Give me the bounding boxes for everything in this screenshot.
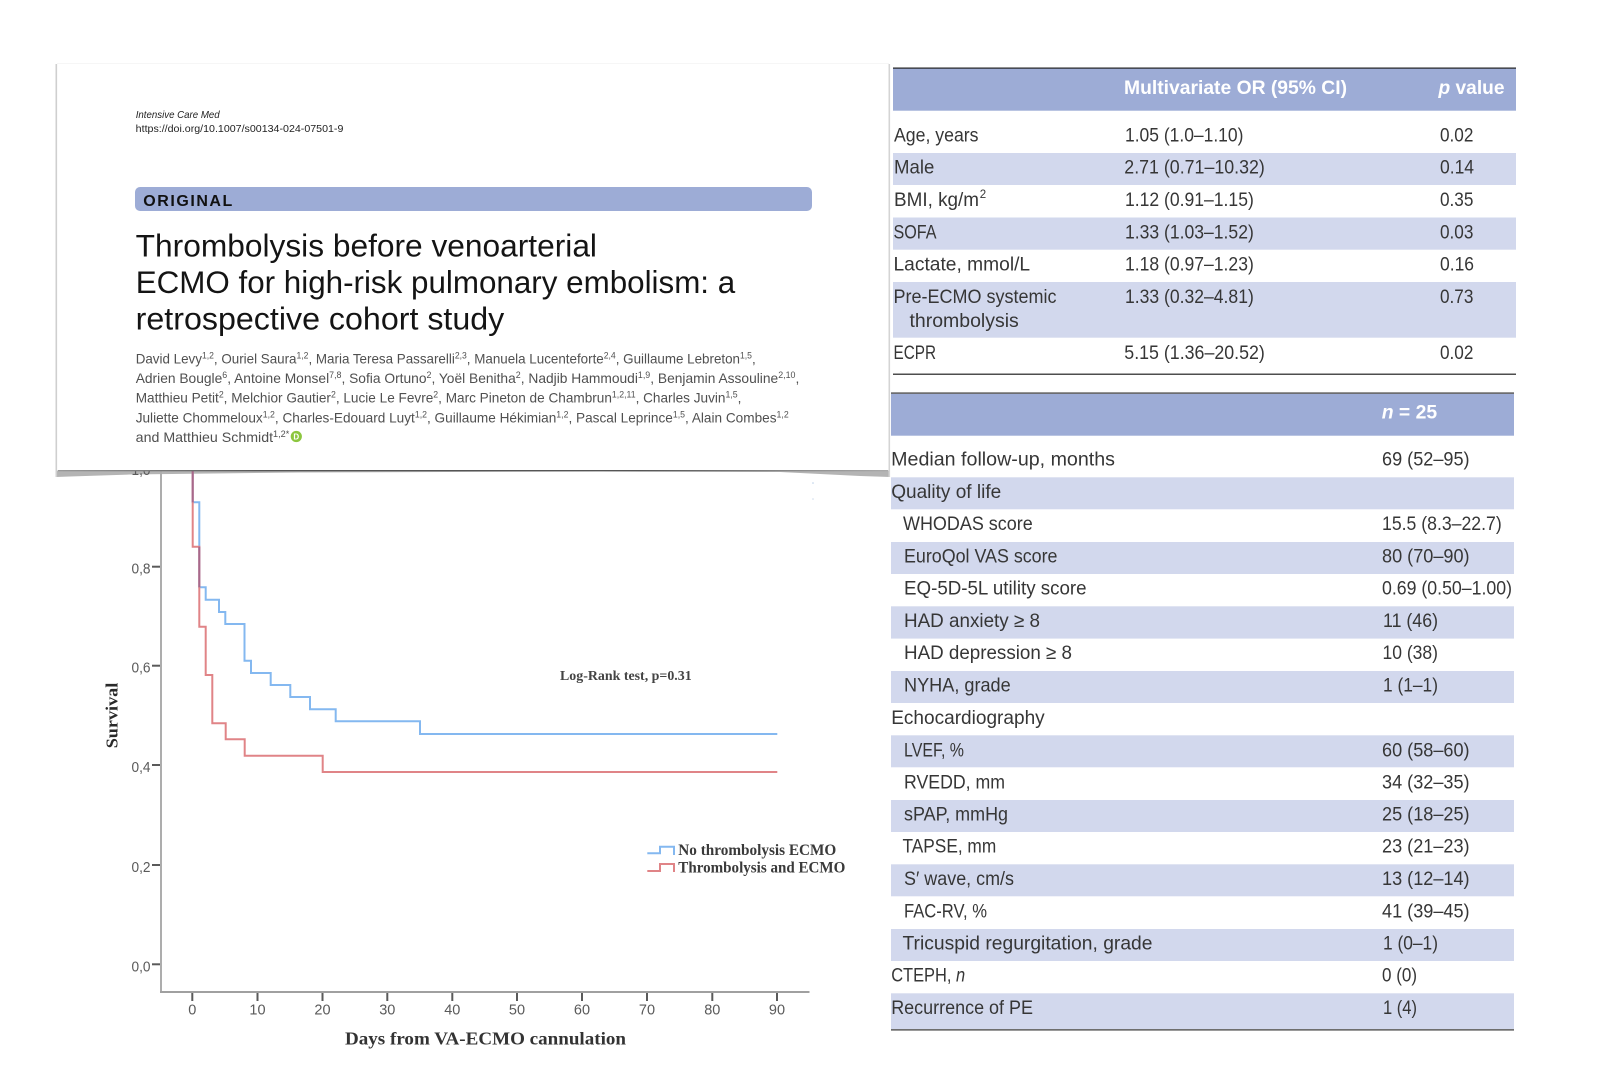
row: ECPR: 5.15 (1.36–20.52): [1124, 342, 1265, 364]
authors: 2: [331, 390, 336, 400]
authors: , Pascal Leprince: [568, 409, 673, 425]
x axis labels: 60: [574, 1003, 590, 1019]
table: long-term outcomes: [891, 392, 1514, 1031]
row: HAD depression: [904, 642, 1438, 664]
row: pre-ECMO thrombolysis: 1.33 (0.32–4.81): [1125, 286, 1254, 308]
authors: Adrien Bougle: [136, 370, 224, 386]
row: EuroQol: [891, 542, 1514, 574]
row: FAC-RV: [904, 900, 1470, 922]
row: ECPR: ECPR: [894, 342, 936, 364]
row: lactate: Lactate, mmol/L: [894, 254, 1030, 276]
row: HAD anxiety: HAD anxiety ≥ 8: [904, 610, 1040, 632]
row: SOFA: [893, 218, 1516, 250]
row: LVEF: 60 (58–60): [1382, 739, 1470, 761]
authors: 2: [219, 390, 224, 400]
authors: 2,10: [778, 370, 795, 380]
row: sPAP: sPAP, mmHg: [904, 804, 1008, 826]
authors: 1,2: [202, 350, 214, 360]
authors: Juliette Chommeloux: [136, 409, 266, 425]
authors: 1,2: [415, 409, 427, 419]
x axis: [160, 992, 810, 1001]
authors: 1,2: [297, 350, 308, 360]
row: male: 2.71 (0.71–10.32): [1124, 157, 1265, 179]
original banner: ORIGINAL: [143, 193, 233, 210]
article title: retrospective cohort study: [136, 300, 505, 336]
legend: no thrombolysis ECMO: No thrombolysis ECMO: [678, 842, 836, 859]
row: CTEPH: [891, 965, 1417, 987]
row: recurrence of PE: Recurrence of PE: [891, 997, 1033, 1019]
row: NYHA: 1 (1–1): [1383, 674, 1438, 696]
curve: thrombolysis and ECMO: [193, 466, 777, 772]
row: EuroQol: 80 (70–90): [1382, 546, 1470, 568]
icon: ORCID badge: D: [293, 433, 299, 442]
row: RVEDD: RVEDD, mm: [904, 772, 1005, 794]
row: EQ-5D-5L: 0.69 (0.50–1.00): [1382, 578, 1512, 600]
row: ECPR: 0.02: [1440, 342, 1473, 364]
authors: , Guillaume Hékimian: [427, 409, 556, 425]
row: quality of life: [891, 477, 1514, 509]
row: pre-ECMO thrombolysis: 0.73: [1440, 286, 1473, 308]
authors: , Manuela Lucenteforte: [467, 350, 604, 366]
row: LVEF: LVEF, %: [904, 739, 964, 761]
row: age: 0.02: [1440, 124, 1473, 146]
card shadow: [56, 470, 890, 477]
row: BMI: 0.35: [1440, 189, 1474, 211]
article title: [136, 228, 736, 336]
row: TAPSE: TAPSE, mm: [902, 836, 996, 858]
y axis labels: 0,2: [132, 860, 150, 876]
article title: ECMO for high-risk pulmonary embolism: a: [136, 264, 736, 300]
y axis labels: [132, 463, 150, 975]
authors: 1,9: [638, 370, 650, 380]
row: BMI: 2: [980, 189, 986, 201]
row: median follow-up: Median follow-up, months: [891, 449, 1115, 471]
row: LVEF: [891, 735, 1514, 767]
journal reference: https://doi.org/10.1007/s00134-024-07501-9: [136, 123, 344, 135]
row: HAD depression: 10 (38): [1382, 642, 1438, 664]
row: pre-ECMO thrombolysis: Pre-ECMO systemic: [894, 286, 1057, 308]
row: BMI: 1.12 (0.91–1.15): [1125, 189, 1254, 211]
authors: [136, 350, 799, 445]
authors: ,: [738, 390, 741, 406]
original banner: [135, 187, 812, 211]
x axis labels: 30: [379, 1003, 395, 1019]
legend: thrombolysis and ECMO: Thrombolysis and ECMO: [678, 859, 845, 876]
authors: 7,8: [329, 370, 341, 380]
authors: , Ouriel Saura: [214, 350, 297, 366]
row: age: 1.05 (1.0–1.10): [1125, 124, 1243, 146]
row: BMI: [894, 189, 1474, 211]
icon: ORCID badge: [291, 431, 302, 442]
authors: 2: [516, 370, 521, 380]
row: EQ-5D-5L: EQ-5D-5L utility score: [904, 578, 1087, 600]
y axis labels: 0,0: [132, 959, 150, 975]
row: HAD depression: HAD depression ≥ 8: [904, 642, 1072, 664]
row: CTEPH: 0 (0): [1382, 965, 1417, 987]
authors: 1,2: [777, 409, 789, 419]
authors: , Melchior Gautier: [224, 390, 331, 406]
row: male: Male: [894, 157, 934, 179]
curve: no thrombolysis ECMO: [193, 466, 777, 734]
authors: 2: [433, 390, 438, 400]
authors: 1,2: [263, 409, 275, 419]
row: NYHA: [891, 671, 1514, 703]
x axis labels: 90: [769, 1003, 785, 1019]
y axis labels: 0,8: [132, 562, 150, 578]
x axis labels: 0: [188, 1003, 196, 1019]
table header: [891, 392, 1514, 436]
row: WHODAS: 15.5 (8.3–22.7): [1382, 513, 1502, 535]
x axis labels: 40: [444, 1003, 460, 1019]
authors: 1,2*: [273, 429, 290, 439]
row: FAC-RV: 41 (39–45): [1382, 900, 1470, 922]
authors: , Benjamin Assouline: [650, 370, 778, 386]
authors: 2,4: [604, 350, 616, 360]
x axis labels: 50: [509, 1003, 525, 1019]
row: TAPSE: 23 (21–23): [1382, 836, 1470, 858]
table header: [893, 68, 1516, 111]
article title: Thrombolysis before venoarterial: [136, 228, 597, 264]
row: lactate: [894, 254, 1474, 276]
authors: 1,5: [740, 350, 752, 360]
row: male: [893, 153, 1516, 185]
authors: David Levy: [136, 350, 205, 366]
row: median follow-up: 69 (52–95): [1382, 449, 1470, 471]
journal reference: [136, 109, 344, 135]
row: HAD anxiety: [891, 606, 1514, 639]
row: S' wave: [891, 864, 1514, 896]
journal reference: Intensive Care Med: [136, 109, 221, 121]
row: SOFA: 0.03: [1440, 221, 1473, 243]
authors: 2: [427, 370, 431, 380]
authors: 1,5: [673, 409, 685, 419]
row: recurrence of PE: 1 (4): [1383, 997, 1417, 1019]
authors: , Antoine Monsel: [227, 370, 329, 386]
table header: n = 25: [1382, 401, 1437, 423]
authors: , Lucie Le Fevre: [336, 390, 433, 406]
row: recurrence of PE: [891, 993, 1514, 1029]
row: median follow-up: [891, 449, 1470, 471]
row: sPAP: 25 (18–25): [1382, 804, 1470, 826]
row: EuroQol: EuroQol VAS score: [904, 546, 1058, 568]
row: echocardiography: Echocardiography: [891, 707, 1045, 729]
table: multivariate analysis: [893, 68, 1516, 375]
row: RVEDD: [904, 772, 1470, 794]
authors: 1,2: [556, 409, 568, 419]
row: S' wave: S′ wave, cm/s: [904, 868, 1014, 890]
y axis labels: 0,4: [132, 760, 150, 776]
y axis labels: 0,6: [132, 661, 150, 677]
authors: and Matthieu Schmidt: [136, 429, 271, 445]
log-rank annotation: Log-Rank test, p=0.31: [560, 668, 692, 683]
authors: , Alain Combes: [685, 409, 777, 425]
row: CTEPH: CTEPH, n: [891, 965, 965, 987]
authors: ,: [752, 350, 756, 366]
row: lactate: 1.18 (0.97–1.23): [1125, 254, 1254, 276]
legend: [647, 842, 845, 876]
row: EQ-5D-5L: [904, 578, 1512, 600]
row: WHODAS: [903, 513, 1502, 535]
x axis labels: 10: [249, 1003, 266, 1019]
table header: Multivariate OR (95% CI): [1124, 77, 1347, 99]
row: RVEDD: 34 (32–35): [1382, 772, 1470, 794]
authors: , Nadjib Hammoudi: [521, 370, 638, 386]
authors: 2,3: [455, 350, 467, 360]
row: SOFA: 1.33 (1.03–1.52): [1125, 221, 1254, 243]
y axis labels: 1,0: [132, 463, 150, 479]
row: pre-ECMO thrombolysis: [893, 282, 1516, 338]
row: sPAP: [891, 800, 1514, 832]
y axis title: Survival: [102, 682, 121, 748]
row: age: [894, 124, 1473, 146]
row: WHODAS: WHODAS score: [903, 513, 1033, 535]
y axis: [152, 466, 161, 992]
row: FAC-RV: FAC-RV, %: [904, 900, 987, 922]
survival chart: [102, 463, 845, 1048]
authors: 1,5: [725, 390, 738, 400]
row: tricuspid regurgitation: Tricuspid regurgitation, grade: [902, 933, 1152, 955]
authors: , Maria Teresa Passarelli: [308, 350, 455, 366]
x axis labels: 80: [704, 1003, 720, 1019]
authors: 6: [222, 370, 227, 380]
authors: , Charles Juvin: [636, 390, 725, 406]
x axis labels: [188, 1003, 785, 1019]
row: HAD anxiety: 11 (46): [1383, 610, 1438, 632]
row: pre-ECMO thrombolysis: thrombolysis: [910, 310, 1019, 332]
row: male: 0.14: [1440, 157, 1474, 179]
row: ECPR: [894, 342, 1473, 364]
row: NYHA: NYHA, grade: [904, 674, 1011, 696]
row: age: Age, years: [894, 124, 979, 146]
x axis title: Days from VA-ECMO cannulation: [345, 1028, 626, 1048]
authors: , Charles-Edouard Luyt: [275, 409, 415, 425]
authors: ,: [795, 370, 799, 386]
x axis labels: 70: [639, 1003, 655, 1019]
row: BMI: BMI, kg/m: [894, 189, 979, 211]
table header: p value: [1438, 77, 1505, 99]
article card: [56, 63, 890, 477]
authors: , Marc Pineton de Chambrun: [438, 390, 612, 406]
authors: , Guillaume Lebreton: [616, 350, 740, 366]
authors: Matthieu Petit: [136, 390, 221, 406]
row: SOFA: SOFA: [894, 221, 936, 243]
row: tricuspid regurgitation: [891, 929, 1514, 961]
row: lactate: 0.16: [1440, 254, 1474, 276]
row: S' wave: 13 (12–14): [1382, 868, 1470, 890]
x axis labels: 20: [314, 1003, 331, 1019]
authors: , Yoël Benitha: [431, 370, 516, 386]
authors: , Sofia Ortuno: [341, 370, 427, 386]
authors: 1,2,11: [612, 390, 636, 400]
row: tricuspid regurgitation: 1 (0–1): [1383, 933, 1438, 955]
row: quality of life: Quality of life: [891, 481, 1001, 503]
row: TAPSE: [902, 836, 1470, 858]
